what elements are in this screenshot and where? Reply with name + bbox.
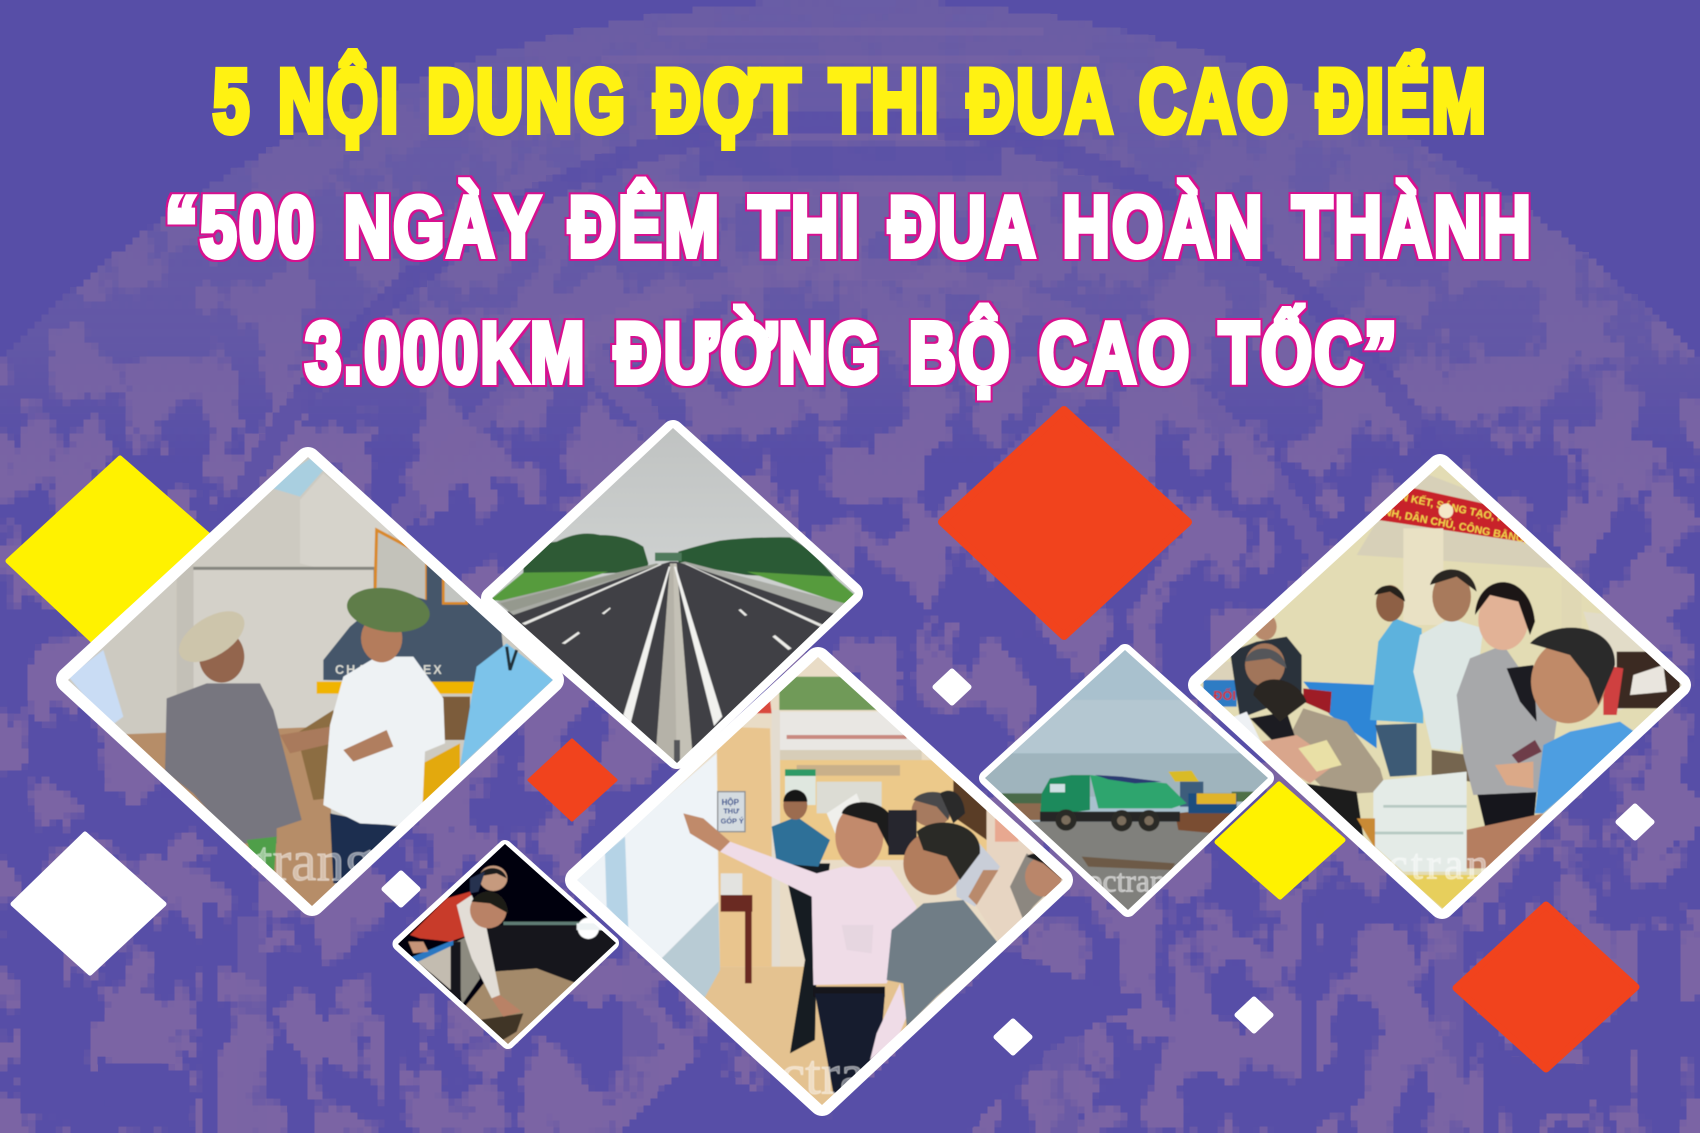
photo: road inspection with farmers: trang [257, 831, 373, 893]
photo: compensation payment meeting: ĐỐI [1213, 688, 1236, 703]
photo: night inspection [390, 835, 623, 1055]
diamond: large red top [942, 410, 1188, 636]
photo: finished expressway [480, 420, 870, 770]
diamond: large yellow left [8, 458, 260, 690]
diamond: large red bottom right [1456, 905, 1636, 1069]
photo: compensation payment meeting: octrang [1363, 840, 1513, 888]
diamond: small white 3 [996, 1021, 1030, 1053]
diamond: small red centre [529, 740, 616, 820]
photo: compensation payment meeting: NH, DÂN CHỦ, CÔNG BẰNG, VĂ [1383, 505, 1546, 549]
diamond: small white 2 [935, 671, 969, 703]
title lines 2 and 3 [165, 179, 1533, 401]
photo: compensation payment meeting: N KẾT, SÁNG TẠO, PH [1399, 490, 1513, 527]
diamond: small white 5 [1618, 806, 1652, 838]
photo: officials checking map: GÓP Ý [721, 816, 744, 825]
photo: dump truck on site [975, 640, 1275, 920]
diamond: small white 1 [384, 873, 418, 905]
title line 3: 3.000KM ĐƯỜNG BỘ CAO TỐC” [305, 305, 1399, 401]
diamond: yellow centre right [1217, 784, 1343, 897]
photo: officials checking map [570, 650, 1070, 1120]
photo: road inspection with farmers: CHANGLIN EX [335, 663, 442, 677]
diamond: large white left [13, 834, 164, 973]
photo: road inspection with farmers [60, 450, 570, 920]
photo: officials checking map: ctra [780, 1044, 865, 1106]
diamond: small white 4 [1237, 999, 1271, 1031]
photo: officials checking map: HỘP [722, 798, 740, 807]
photo: compensation payment meeting [1190, 455, 1690, 925]
photo: dump truck on site: octran [1087, 864, 1166, 899]
photo: officials checking map: THƯ [723, 806, 740, 815]
